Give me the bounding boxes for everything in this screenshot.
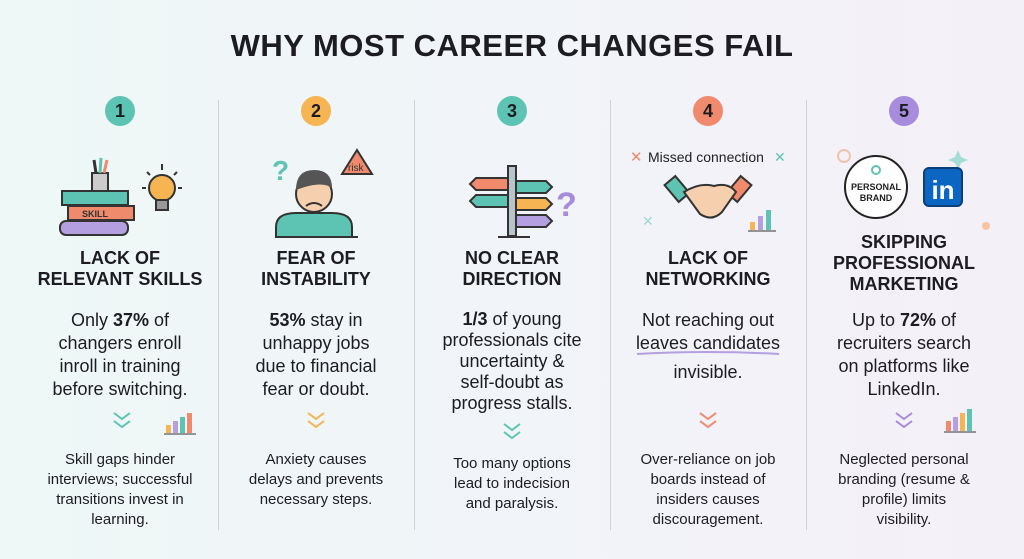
summary: lead to indecision <box>454 475 570 492</box>
panel: lack of relevant skills <box>38 96 202 528</box>
stat text: Only 37% of <box>71 310 169 330</box>
number 5 <box>889 96 919 126</box>
summary: transitions invest in <box>56 491 184 508</box>
stat text: LinkedIn. <box>867 379 941 399</box>
icon: books and lightbulb <box>59 158 182 236</box>
stat text: fear or doubt. <box>262 379 370 399</box>
summary: visibility. <box>877 511 931 528</box>
stat text: on platforms like <box>838 356 970 376</box>
summary: Neglected personal <box>839 451 969 468</box>
number 3 <box>497 96 527 126</box>
panel: lack of networking <box>630 96 786 528</box>
summary: delays and prevents <box>249 471 383 488</box>
stat text: changers enroll <box>58 333 182 353</box>
number 1 <box>105 96 135 126</box>
stat text <box>837 310 971 399</box>
summary: boards instead of <box>650 471 766 488</box>
stat text: unhappy jobs <box>262 333 370 353</box>
icon: handshake with missed connection: ✕ <box>774 149 786 165</box>
heading <box>261 248 371 289</box>
summary: and paralysis. <box>466 495 558 512</box>
stat text: professionals cite <box>442 330 582 350</box>
stat text: 1/3 of young <box>462 309 562 329</box>
summary: Too many options <box>453 455 571 472</box>
summary <box>47 451 193 528</box>
summary: Over-reliance on job <box>640 451 776 468</box>
icon: handshake with missed connection <box>630 149 786 232</box>
icon: worried person: risk <box>348 163 365 174</box>
icon: personal brand and linkedin <box>837 149 990 230</box>
icon: personal brand and linkedin: PERSONAL <box>851 182 902 192</box>
summary <box>249 451 383 508</box>
icon: personal brand and linkedin: in <box>931 175 955 205</box>
heading: LACK OF <box>80 248 160 268</box>
number 1: 1 <box>115 101 125 121</box>
icon: handshake with missed connection: Missed connection <box>648 149 764 165</box>
heading: FEAR OF <box>276 248 356 268</box>
summary: Anxiety causes <box>266 451 366 468</box>
stat text: progress stalls. <box>451 393 573 413</box>
title: WHY MOST CAREER CHANGES FAIL <box>231 28 793 63</box>
panel: skipping professional marketing <box>833 96 990 528</box>
stat text: invisible. <box>673 362 743 382</box>
heading: LACK OF <box>668 248 748 268</box>
summary: profile) limits <box>862 491 946 508</box>
heading <box>833 232 975 294</box>
stat text: due to financial <box>255 356 377 376</box>
summary: necessary steps. <box>260 491 372 508</box>
stat text <box>636 310 780 382</box>
icon: books and lightbulb: SKILL <box>82 209 109 219</box>
summary <box>453 455 571 512</box>
stat text <box>442 309 582 413</box>
number 4 <box>693 96 723 126</box>
panel: fear of instability <box>249 96 383 508</box>
stat text: leaves candidates <box>636 333 780 353</box>
number 4: 4 <box>703 101 713 121</box>
chevron and chart <box>114 412 196 434</box>
summary <box>838 451 970 528</box>
chevron <box>504 423 520 440</box>
summary <box>640 451 776 528</box>
summary: insiders causes <box>656 491 760 508</box>
number 2: 2 <box>311 101 321 121</box>
heading: DIRECTION <box>462 269 562 289</box>
icon: handshake with missed connection: ✕ <box>642 213 654 229</box>
icon: signpost <box>468 165 577 238</box>
summary: branding (resume & <box>838 471 970 488</box>
number 3: 3 <box>507 101 517 121</box>
heading: NETWORKING <box>646 269 770 289</box>
stat text: self-doubt as <box>460 372 564 392</box>
stat text: 53% stay in <box>269 310 363 330</box>
summary: Skill gaps hinder <box>65 451 175 468</box>
stat text <box>52 310 188 399</box>
stat text: Up to 72% of <box>852 310 956 330</box>
heading <box>462 248 562 289</box>
heading: RELEVANT SKILLS <box>38 269 202 289</box>
stat text: uncertainty & <box>459 351 565 371</box>
stat text: inroll in training <box>59 356 181 376</box>
heading <box>646 248 770 289</box>
stat text <box>255 310 377 399</box>
heading: SKIPPING <box>861 232 947 252</box>
icon: signpost: ? <box>556 186 577 224</box>
chevron <box>308 412 324 428</box>
heading: NO CLEAR <box>465 248 559 268</box>
heading: MARKETING <box>850 274 958 294</box>
icon: personal brand and linkedin: BRAND <box>860 193 893 203</box>
icon: worried person: ? <box>272 155 289 186</box>
stat text: Not reaching out <box>642 310 774 330</box>
chevron and chart <box>896 409 976 432</box>
icon: worried person <box>272 148 374 238</box>
summary: interviews; successful <box>47 471 193 488</box>
number 2 <box>301 96 331 126</box>
heading <box>38 248 202 289</box>
heading: PROFESSIONAL <box>833 253 975 273</box>
number 5: 5 <box>899 101 909 121</box>
summary: discouragement. <box>653 511 763 528</box>
stat text: before switching. <box>52 379 188 399</box>
icon: handshake with missed connection: ✕ <box>630 149 643 166</box>
chevron <box>700 412 716 428</box>
heading: INSTABILITY <box>261 269 371 289</box>
stat text: recruiters search <box>837 333 971 353</box>
panel: no clear direction <box>442 96 582 512</box>
summary: learning. <box>91 511 149 528</box>
